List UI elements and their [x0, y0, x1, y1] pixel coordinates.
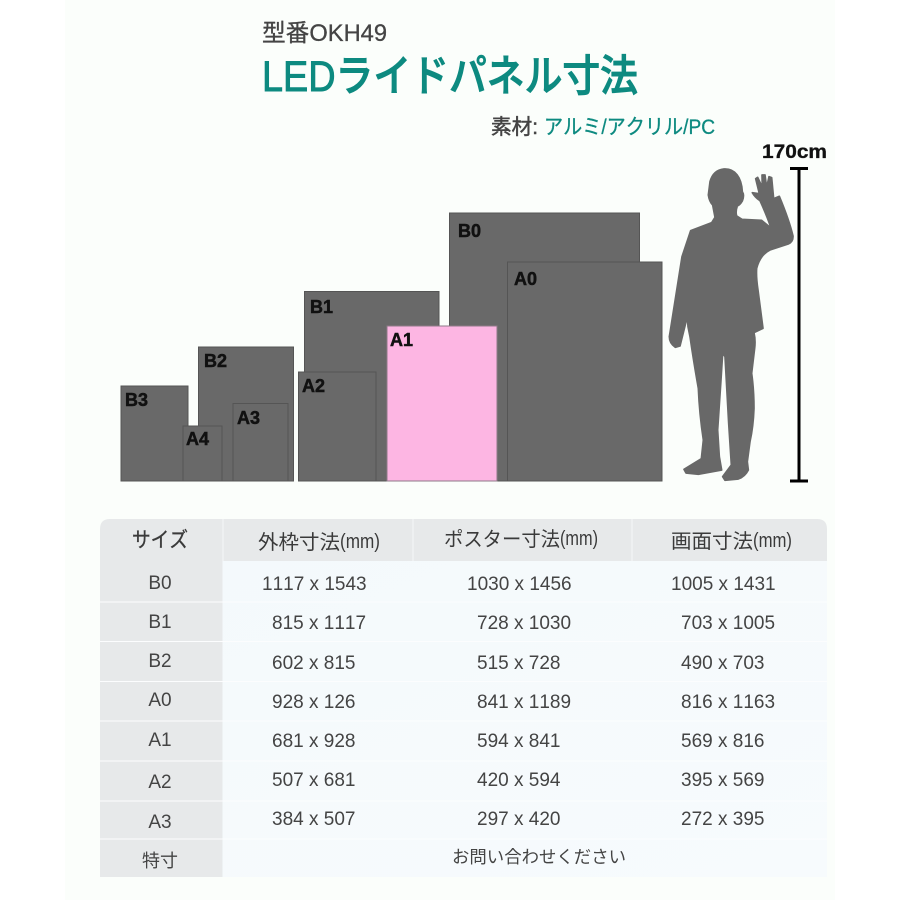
row special size	[142, 847, 626, 871]
row B0: 1030 x 1456	[467, 574, 572, 595]
row A0: A0	[148, 690, 172, 711]
table header row	[100, 519, 827, 561]
table header row: 画面寸法	[671, 530, 753, 553]
row A3: 272 x 395	[681, 809, 764, 830]
row B2: 490 x 703	[681, 653, 764, 674]
row B1: 728 x 1030	[477, 613, 571, 634]
row B1: 815 x 1117	[272, 613, 366, 634]
row B1: 703 x 1005	[681, 613, 775, 634]
panel A3: A3	[237, 408, 260, 428]
title: LEDライドパネル寸法	[262, 53, 638, 101]
row B0: B0	[148, 573, 172, 594]
row B2: 515 x 728	[477, 653, 560, 674]
row A0: 928 x 126	[272, 692, 355, 713]
row B2	[148, 651, 764, 674]
row A2: 395 x 569	[681, 770, 764, 791]
icon: human silhouette	[669, 169, 793, 480]
material line: アルミ/アクリル/PC	[544, 116, 715, 139]
row B0: 1117 x 1543	[262, 574, 367, 595]
material line: 素材:	[491, 116, 538, 139]
heading: model number: 型番OKH49	[262, 20, 387, 47]
row A2: A2	[148, 772, 172, 793]
table header row: サイズ	[132, 529, 188, 552]
panel A1 (highlighted): A1	[390, 330, 413, 350]
height scale: 170cm	[762, 142, 827, 481]
row A3: A3	[148, 812, 172, 833]
row A1: 681 x 928	[272, 731, 355, 752]
table header row: (mm)	[560, 528, 598, 550]
row A1: 594 x 841	[477, 731, 560, 752]
row A0: 816 x 1163	[681, 692, 775, 713]
row B1	[148, 612, 775, 634]
panel B3	[121, 386, 188, 481]
panel A2	[298, 372, 376, 481]
row A2: 420 x 594	[477, 770, 561, 791]
table first column background	[100, 561, 222, 877]
panel B1: B1	[310, 297, 333, 317]
row A3: 297 x 420	[477, 809, 560, 830]
panel B1	[304, 292, 439, 481]
table body background	[100, 561, 827, 877]
panel A3	[233, 404, 288, 481]
row A3	[148, 809, 764, 833]
panel A0	[508, 262, 662, 481]
table: dimensions	[100, 519, 827, 877]
panel B3: B3	[125, 390, 148, 410]
panel B2	[198, 347, 294, 481]
row A1: A1	[148, 730, 172, 751]
row A1: 569 x 816	[681, 731, 764, 752]
panel A4	[183, 426, 222, 481]
panel A1 (highlighted)	[387, 326, 497, 481]
row B1: B1	[148, 612, 172, 633]
row B0	[148, 573, 776, 595]
row B2: B2	[148, 651, 172, 672]
height scale: 170cm: 170cm	[762, 142, 827, 163]
row A0: 841 x 1189	[477, 692, 571, 713]
panel A0: A0	[514, 269, 537, 289]
row B0: 1005 x 1431	[671, 574, 776, 595]
panel A2: A2	[302, 376, 325, 396]
panel B0	[450, 213, 640, 481]
row A2	[148, 770, 764, 793]
row A0	[148, 690, 775, 713]
table header row: (mm)	[753, 530, 792, 552]
row special size: 特寸	[142, 851, 178, 871]
chart: panel size comparison	[121, 213, 662, 481]
row special size: お問い合わせください	[452, 847, 626, 867]
row B2: 602 x 815	[272, 653, 355, 674]
row A3: 384 x 507	[272, 809, 355, 830]
row A1	[148, 730, 764, 752]
table header row: (mm)	[340, 531, 380, 553]
table header row: 外枠寸法	[258, 531, 340, 554]
panel B2: B2	[204, 351, 227, 371]
table header row: ポスター寸法	[444, 528, 560, 551]
row A2: 507 x 681	[272, 770, 355, 791]
panel A4: A4	[186, 429, 209, 449]
panel B0: B0	[458, 221, 481, 241]
